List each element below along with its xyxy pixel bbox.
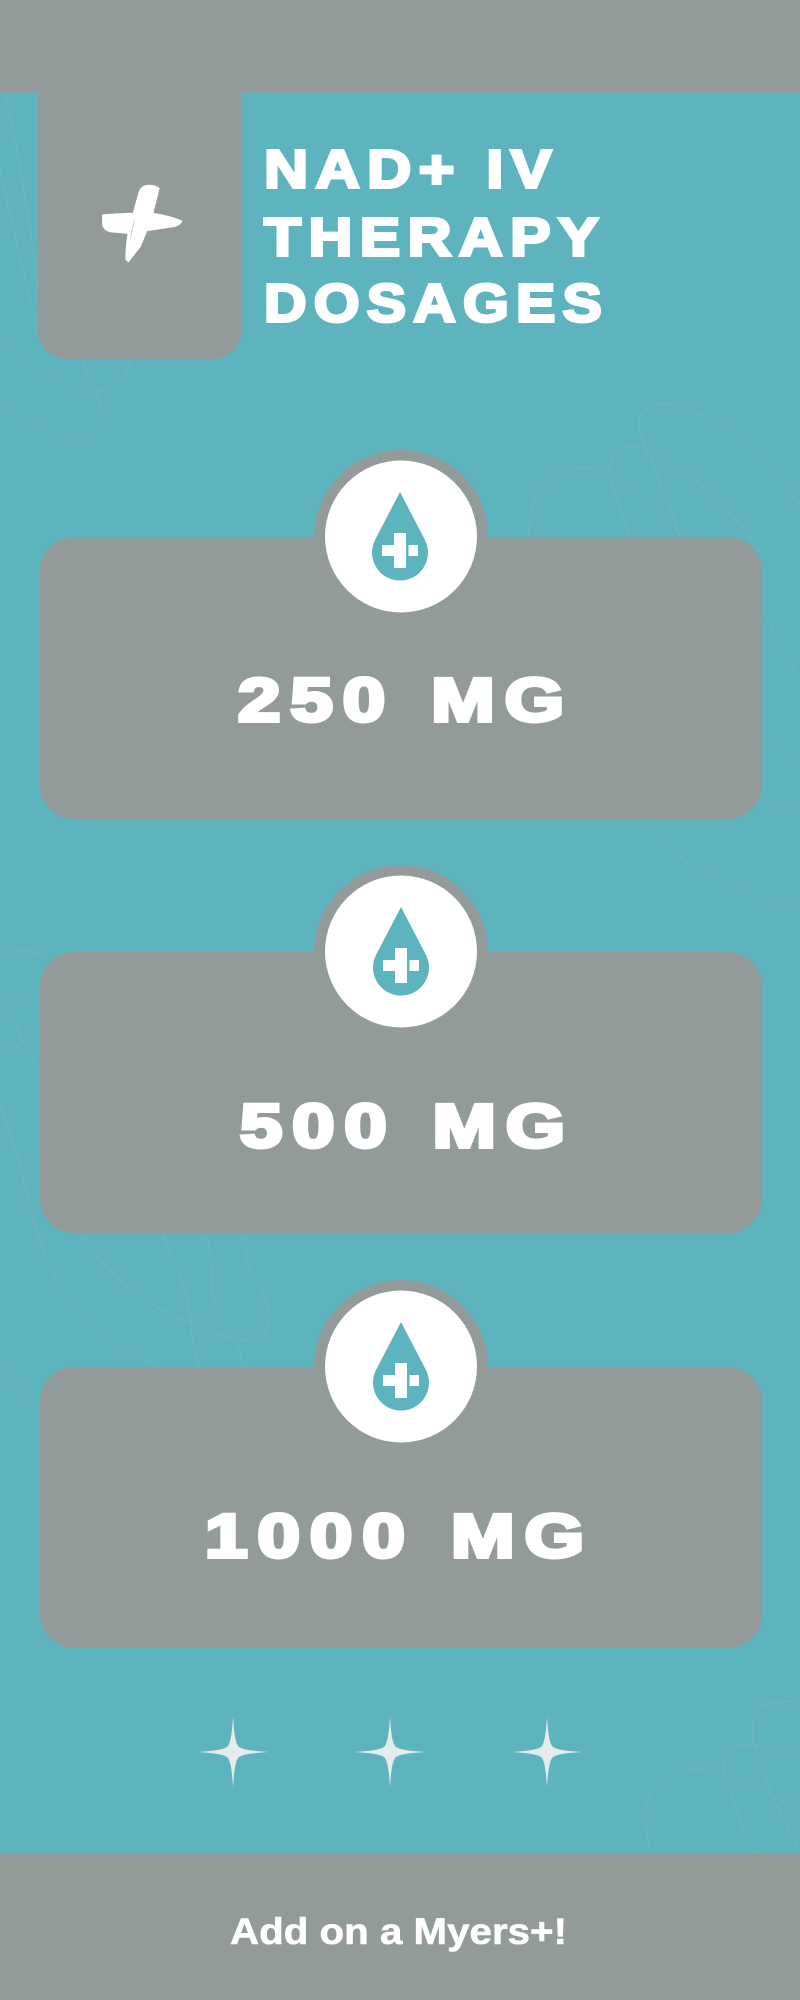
logo panel <box>38 92 241 359</box>
top header bar <box>0 0 800 92</box>
icon: brush plus logo <box>103 185 182 262</box>
icon: 1000 mg drop badge <box>325 1290 477 1442</box>
dosage label: 250 MG: 250 MG <box>238 666 574 734</box>
icon: 500 mg drop badge <box>325 876 477 1028</box>
title: THERAPY <box>264 208 606 268</box>
title: DOSAGES <box>264 274 609 334</box>
panel: 250 mg dosage <box>40 450 762 819</box>
footer bar <box>0 1854 800 2000</box>
panel: 500 mg dosage <box>40 865 762 1233</box>
footer call to action: Add on a Myers+! <box>230 1911 567 1952</box>
icon: 250 mg drop badge <box>325 460 477 612</box>
panel: 1000 mg dosage <box>40 1280 762 1648</box>
dosage label: 1000 MG: 1000 MG <box>205 1502 594 1570</box>
title <box>264 140 609 334</box>
row of sparkle stars <box>198 1717 582 1787</box>
title: NAD+ IV <box>264 140 559 200</box>
dosage label: 500 MG: 500 MG <box>240 1092 575 1160</box>
